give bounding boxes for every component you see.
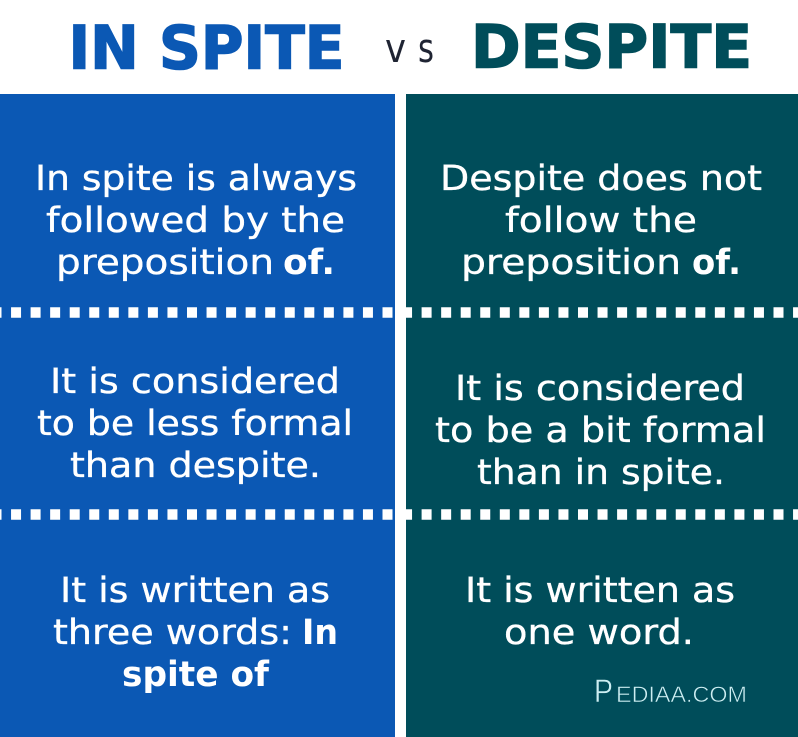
title: vs xyxy=(385,26,434,72)
row 2 right text: to be a bit formal xyxy=(435,411,766,451)
row 2 right text: than in spite. xyxy=(477,453,725,493)
row 1 left text: followed by the xyxy=(46,201,345,241)
row 1 left text: preposition xyxy=(56,243,274,283)
row 2 right text xyxy=(435,369,766,493)
row 3 left text: spite of xyxy=(122,655,270,695)
dotted divider 1 xyxy=(0,307,798,318)
title: despite: DESPITE xyxy=(471,12,752,82)
row 2 left text xyxy=(37,362,353,486)
row 1 right text xyxy=(440,159,762,283)
title: vs: v xyxy=(385,26,406,72)
title: in spite: IN SPITE xyxy=(68,13,344,83)
row 2 left text: than despite. xyxy=(70,446,321,486)
row 3 right text xyxy=(465,571,735,653)
row 2 left text: to be less formal xyxy=(37,404,353,444)
row 3 left text xyxy=(53,571,338,695)
row 3 left text: In xyxy=(302,613,338,653)
row 1 left text: of. xyxy=(283,243,335,283)
row 3 right text: one word. xyxy=(504,613,694,653)
row 2 left text: It is considered xyxy=(50,362,340,402)
row 1 right text: follow the xyxy=(505,201,697,241)
logo: pediaa.com xyxy=(594,673,747,709)
row 1 right text: of. xyxy=(692,243,741,283)
row 1 right text: Despite does not xyxy=(440,159,762,199)
logo: pediaa.com: P xyxy=(594,673,613,709)
row 3 left text: It is written as xyxy=(60,571,330,611)
logo: pediaa.com: EDIAA.COM xyxy=(616,682,747,707)
row 3 right text: It is written as xyxy=(465,571,735,611)
row 1 left text xyxy=(35,159,357,283)
row 2 right text: It is considered xyxy=(455,369,745,409)
dotted divider 2 xyxy=(0,509,798,520)
row 1 right text: preposition xyxy=(461,243,681,283)
title: vs: s xyxy=(418,26,434,72)
row 3 left text: three words: xyxy=(53,613,292,653)
panel: despite background xyxy=(406,94,798,737)
panel: in spite background xyxy=(0,94,395,737)
row 1 left text: In spite is always xyxy=(35,159,357,199)
